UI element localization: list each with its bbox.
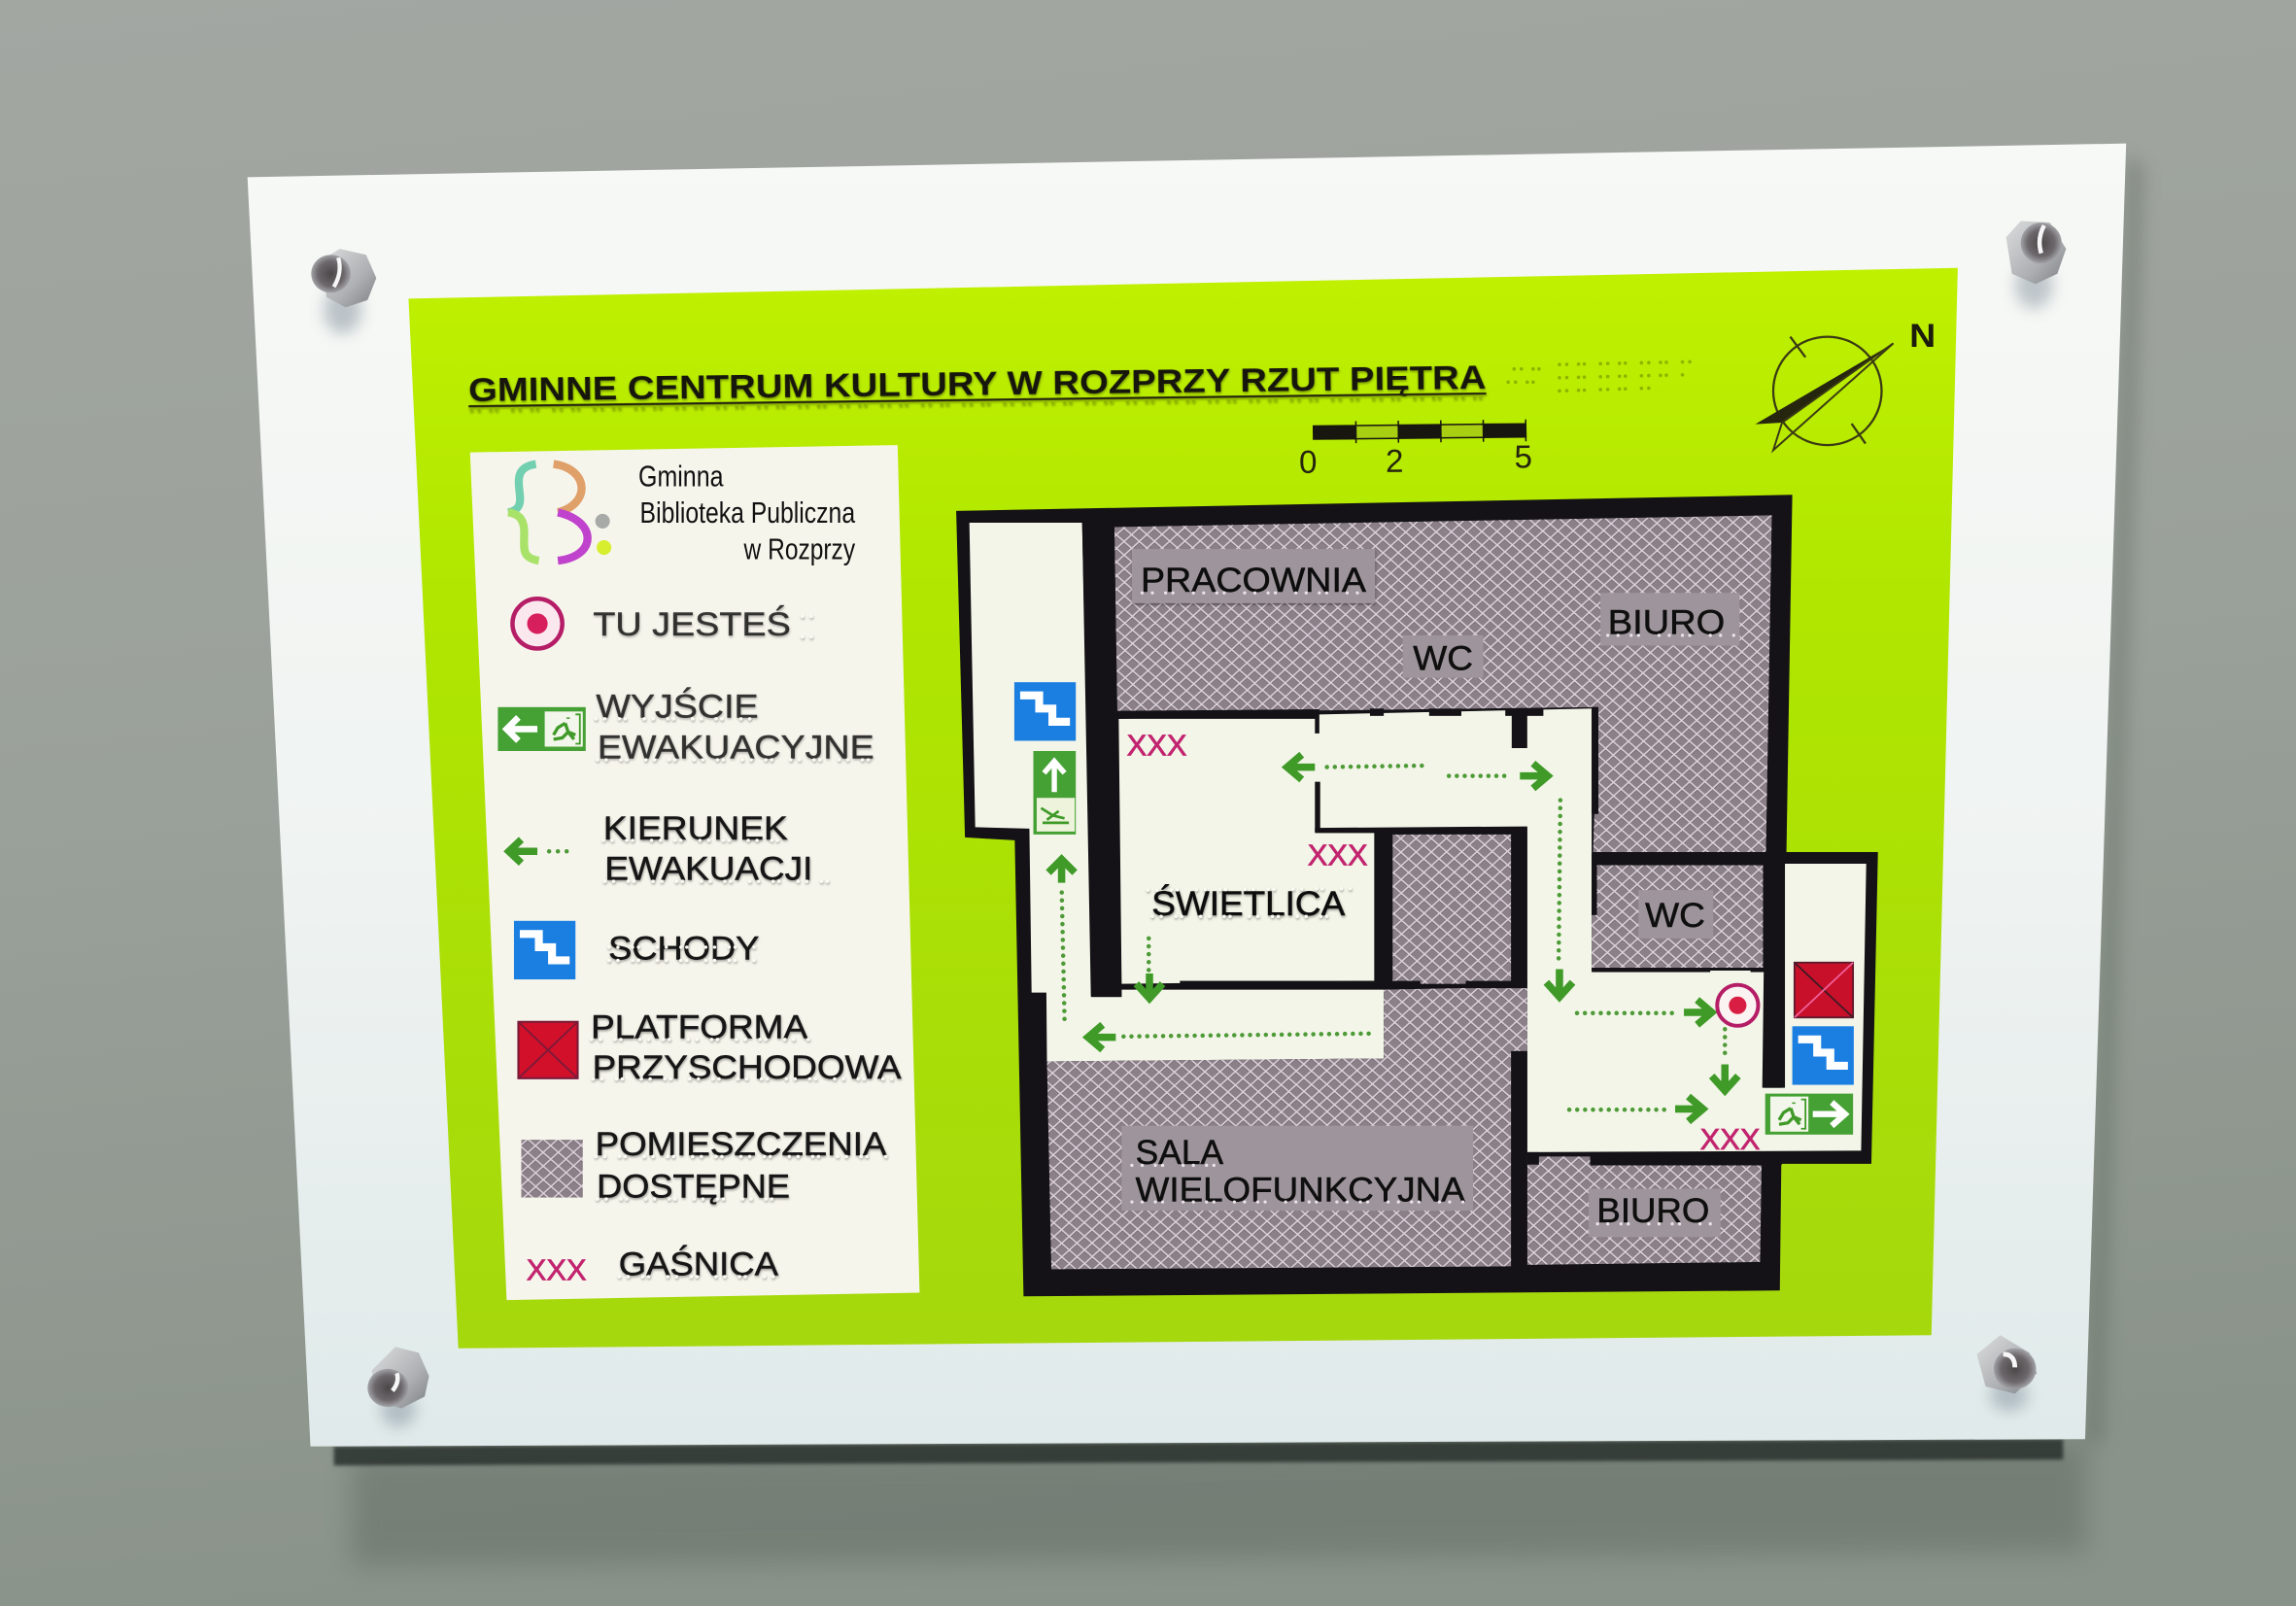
icon: evacuation exit east [1765, 1094, 1853, 1135]
bolt: top left [311, 249, 376, 334]
title: GMINNE CENTRUM KULTURY W ROZPRZY RZUT PIĘTRA [468, 359, 1487, 409]
scale bar: 5 [1514, 439, 1532, 476]
icon: accessible rooms hatch [521, 1140, 583, 1198]
floor plan [956, 495, 1878, 1296]
legend text: POMIESZCZENIA DOSTĘPNE [596, 1126, 887, 1206]
icon: you are here [512, 598, 563, 649]
logo: library mark [508, 464, 611, 561]
braille title [1508, 361, 1698, 391]
marker: extinguisher, lobby: XXX [1700, 1122, 1760, 1156]
sign plate [248, 144, 2126, 1447]
label: Sala Wielofunkcyjna [1121, 1126, 1473, 1211]
bolt: top right [2006, 222, 2066, 309]
plate soft shadow [334, 154, 2143, 1566]
plan outline walls [956, 495, 1878, 1296]
scale bar [1299, 420, 1532, 481]
label: WC east [1638, 890, 1713, 939]
icon: evacuation exit up [1034, 751, 1076, 835]
route: hall exit down [1136, 939, 1163, 999]
label: Pracownia: PRACOWNIA [1141, 561, 1366, 599]
route: corridor right [1449, 764, 1548, 788]
green sign panel [408, 268, 1958, 1349]
route: corridor down [1546, 801, 1573, 997]
scale bar: 2 [1386, 444, 1404, 480]
legend text: GAŚNICA: GAŚNICA [619, 1245, 778, 1282]
legend text: POMIESZCZENIA DOSTĘPNE: POMIESZCZENIA [596, 1126, 887, 1163]
legend text: POMIESZCZENIA DOSTĘPNE: DOSTĘPNE [597, 1169, 790, 1206]
route: lobby right [1569, 1097, 1703, 1121]
logo text: w Rozprzy [743, 532, 856, 566]
legend text: KIERUNEK EWAKUACJI: KIERUNEK [603, 810, 788, 847]
legend text: PLATFORMA PRZYSCHODOWA [591, 1008, 902, 1086]
route: west corridor up [1048, 858, 1075, 1019]
logo text: Gminna [638, 459, 724, 493]
legend text: SCHODY: SCHODY [608, 931, 759, 968]
floor: hall and main corridor [1118, 708, 1867, 1152]
marker: extinguisher, hall north: XXX [1127, 729, 1186, 763]
icon: stairs west [1014, 682, 1076, 740]
legend text: PLATFORMA PRZYSCHODOWA: PRZYSCHODOWA [593, 1049, 902, 1086]
floor: west room and lower corridor [970, 523, 1384, 1061]
room: Sala Wielofunkcyjna [1047, 987, 1527, 1269]
room: WC east [1592, 866, 1763, 968]
icon: stair platform [518, 1022, 578, 1078]
legend text: PLATFORMA PRZYSCHODOWA: PLATFORMA [591, 1008, 808, 1045]
compass [1755, 318, 1936, 450]
label: Biuro south [1589, 1189, 1722, 1237]
icon: stair platform east [1795, 963, 1853, 1017]
label: Sala Wielofunkcyjna: SALA [1136, 1133, 1223, 1172]
interior walls [1082, 521, 1785, 1290]
label: Biuro north [1600, 593, 1739, 646]
route: you-are-here down [1712, 1029, 1738, 1091]
route: lobby to you-are-here [1577, 1000, 1712, 1025]
marker: you are here [1717, 985, 1758, 1026]
legend text: WYJŚCIE EWAKUACYJNE [596, 687, 874, 767]
icon: stairs [514, 921, 575, 979]
label: Biuro north: BIURO [1608, 602, 1725, 641]
scale bar: 0 [1299, 445, 1318, 481]
label: WC north: WC [1413, 638, 1473, 677]
route: corridor left [1287, 755, 1422, 779]
bolt: bottom left [367, 1347, 429, 1427]
legend text: KIERUNEK EWAKUACJI: EWAKUACJI [604, 851, 812, 888]
legend text: TU JESTEŚ: TU JESTEŚ [593, 605, 791, 643]
legend text: KIERUNEK EWAKUACJI [603, 810, 829, 888]
marker: extinguisher, hall east: XXX [1308, 838, 1368, 872]
panel: legend [470, 445, 919, 1300]
logo text [638, 459, 856, 566]
route: lower corridor left [1088, 1025, 1369, 1049]
icon: extinguisher marker: XXX [527, 1253, 587, 1287]
label: WC east: WC [1645, 896, 1705, 935]
icon: evacuation exit [497, 707, 586, 751]
label: Biuro south: BIURO [1596, 1191, 1709, 1230]
room: Biuro south [1527, 1156, 1762, 1265]
label: Sala Wielofunkcyjna: WIELOFUNKCYJNA [1136, 1170, 1465, 1209]
room: Pracownia, WC and Biuro [1114, 515, 1771, 852]
label: Świetlica: ŚWIETLICA [1151, 884, 1346, 923]
icon: stairs east [1793, 1026, 1854, 1085]
compass: N [1909, 318, 1936, 355]
room: central store [1392, 833, 1511, 984]
icon: evacuation direction [509, 839, 575, 863]
label: WC north [1403, 635, 1484, 678]
legend text: WYJŚCIE EWAKUACYJNE: EWAKUACYJNE [598, 730, 874, 767]
label: Pracownia [1132, 549, 1375, 603]
logo text: Biblioteka Publiczna [640, 495, 856, 530]
legend text: WYJŚCIE EWAKUACYJNE: WYJŚCIE [596, 687, 759, 725]
bolt: bottom right [1976, 1335, 2037, 1412]
